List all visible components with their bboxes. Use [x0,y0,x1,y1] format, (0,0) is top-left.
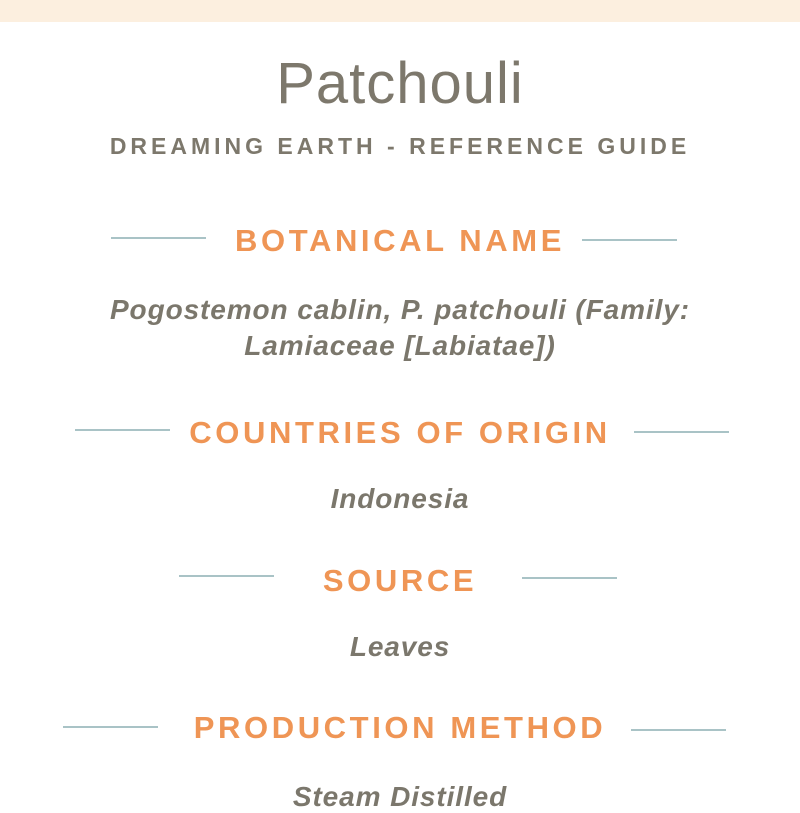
text: botanical name: Pogostemon cablin, P. patchouli (Family: [110,294,690,325]
heading: countries: COUNTRIES OF ORIGIN [189,415,611,450]
section: botanical name [110,223,690,361]
subtitle: DREAMING EARTH - REFERENCE GUIDE [110,133,690,159]
section: source [179,563,617,662]
heading: botanical name: BOTANICAL NAME [235,223,565,258]
text: countries: Indonesia [331,483,469,514]
top band [0,0,800,22]
text: botanical name [110,294,690,361]
text: botanical name: Lamiaceae [Labiatae]) [244,330,556,361]
title: Patchouli [276,51,524,116]
heading: source: SOURCE [323,563,477,598]
heading: production method: PRODUCTION METHOD [194,710,606,745]
section: countries of origin [75,415,729,514]
text: production method: Steam Distilled [293,781,507,812]
text: source: Leaves [350,631,450,662]
section: production method [63,710,726,812]
